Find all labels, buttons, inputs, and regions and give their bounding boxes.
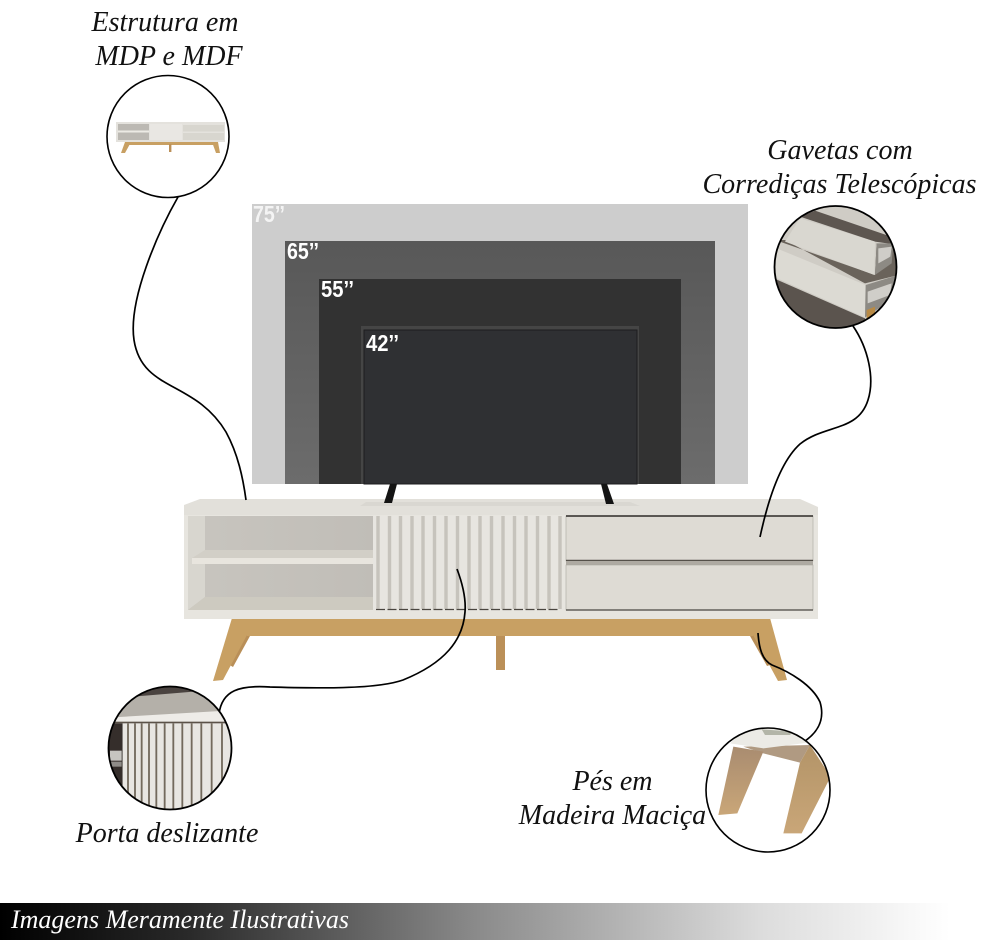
right leg — [753, 618, 787, 681]
caption: structure: MDP e MDF — [94, 41, 244, 72]
caption: legs: Pés em — [571, 766, 653, 797]
TV size comparison — [252, 201, 748, 484]
thumbnail circle — [107, 76, 229, 198]
footer gradient bar: Imagens Meramente Ilustrativas — [10, 905, 349, 934]
bottom drawer — [566, 561, 813, 610]
callout: legs — [518, 727, 831, 852]
top shadow — [360, 502, 640, 506]
callout: drawers — [702, 135, 977, 333]
caption: drawers: Gavetas com — [767, 135, 913, 166]
back leg right — [750, 630, 773, 666]
caption: legs: Madeira Maciça — [518, 800, 706, 831]
caption: drawers: Corrediças Telescópicas — [702, 169, 977, 200]
caption: drawers — [702, 135, 977, 200]
cabinet body — [184, 515, 818, 619]
top drawer — [566, 516, 813, 561]
TV size comparison: 55’’ — [321, 276, 354, 302]
door circle — [108, 686, 232, 810]
caption: legs — [518, 766, 706, 831]
center leg — [496, 634, 505, 670]
TV size comparison: 42’’ — [366, 330, 399, 356]
left leg — [213, 618, 247, 681]
cabinet top — [184, 499, 818, 516]
TV size comparison: 75’’ — [253, 201, 285, 227]
sliding slatted door — [373, 516, 562, 610]
open niche — [188, 516, 373, 610]
callout: structure — [90, 7, 244, 198]
furniture — [184, 499, 818, 681]
drawers circle — [772, 206, 898, 333]
connector: drawers — [760, 326, 871, 537]
connector: legs — [758, 633, 822, 743]
connector: sliding door — [219, 569, 465, 714]
legs circle — [706, 727, 831, 852]
TV size comparison: 65’’ — [287, 238, 319, 264]
front rail — [247, 618, 753, 636]
connector: structure — [133, 197, 246, 500]
caption: structure: Estrutura em — [90, 7, 238, 38]
footer gradient bar — [0, 903, 950, 940]
callout: sliding door — [75, 680, 258, 849]
caption: sliding door: Porta deslizante — [75, 818, 258, 849]
caption: structure — [90, 7, 244, 72]
back leg left — [228, 634, 250, 667]
TV stand feet — [384, 484, 614, 504]
